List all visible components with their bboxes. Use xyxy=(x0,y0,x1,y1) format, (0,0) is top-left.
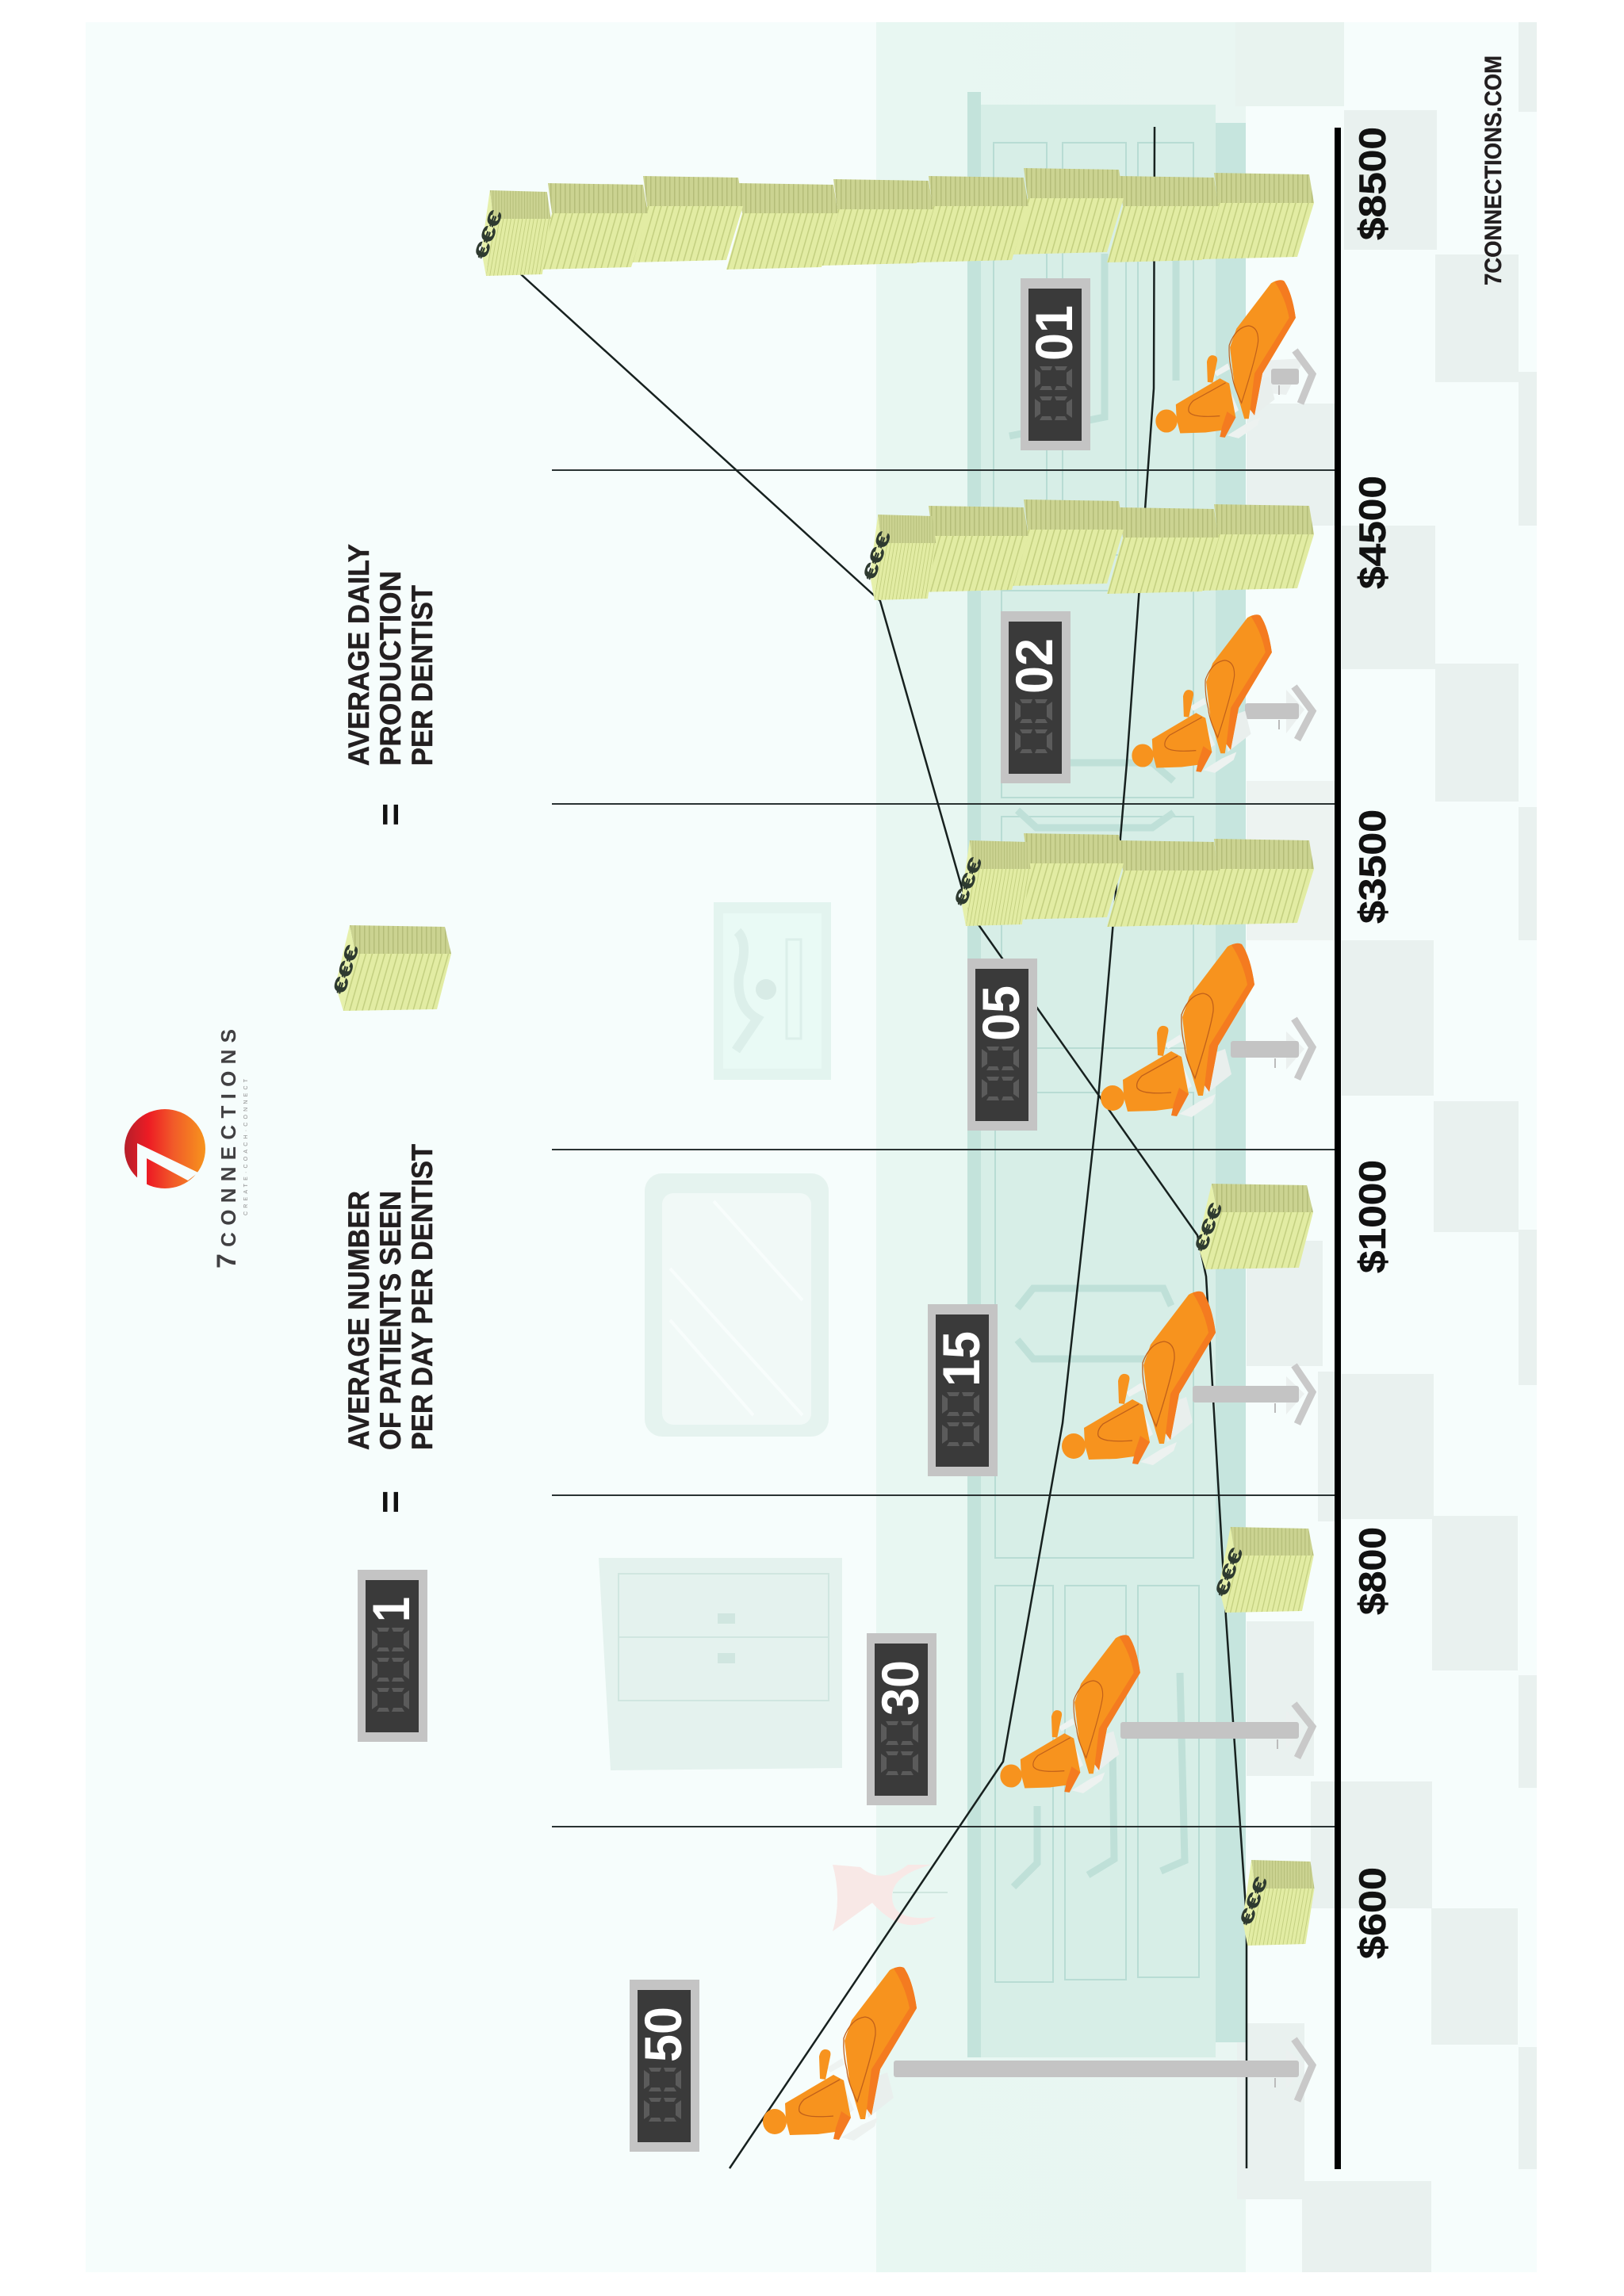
patient counter 15 xyxy=(928,1304,998,1476)
chair pole 800 xyxy=(1120,1704,1312,1758)
axis xyxy=(1335,128,1341,2169)
money stack 800: €€€ xyxy=(1211,1545,1247,1599)
axis labels xyxy=(1351,127,1393,1959)
logo wordmark: 7CONNECTIONS xyxy=(212,1029,242,1269)
chair pole 1000 xyxy=(1193,1365,1312,1424)
chair and patient 4500 xyxy=(1132,614,1272,773)
money stack 1000: €€€ xyxy=(1190,1200,1226,1254)
wall band xyxy=(876,22,1246,2272)
patient counter 15: 15 xyxy=(932,1331,990,1387)
patient counter 50 xyxy=(630,1980,699,2152)
chair and patient 3500 xyxy=(1101,943,1254,1117)
patient counter 50: 50 xyxy=(634,2007,692,2062)
money stack 600 xyxy=(1235,1860,1315,1946)
patient counter 01 xyxy=(1021,278,1090,450)
chair pole 4500 xyxy=(1245,687,1312,740)
money stack 8500: €€€ xyxy=(470,208,506,262)
division lines xyxy=(552,470,1338,1827)
wall cabinet xyxy=(599,1558,842,1770)
money stack 4500: €€€ xyxy=(859,529,894,583)
money stack 800 xyxy=(1211,1527,1314,1613)
tooth sign xyxy=(833,1865,948,1931)
axis labels: $600 xyxy=(1351,1867,1393,1959)
legend text: production: PER DENTIST xyxy=(406,585,439,766)
patients line xyxy=(730,127,1155,2168)
legend counter icon: 1 xyxy=(362,1597,420,1622)
chair and patient 800 xyxy=(1000,1635,1140,1793)
legend text: patients: AVERAGE NUMBER xyxy=(343,1191,375,1450)
legend text: production xyxy=(343,544,439,766)
chair and patient 1000 xyxy=(1062,1292,1216,1465)
chair pole 600 xyxy=(894,2039,1312,2101)
money stack 8500 xyxy=(470,168,1314,276)
money stack 600: €€€ xyxy=(1235,1874,1271,1928)
logo mark xyxy=(124,1109,205,1188)
axis labels: $3500 xyxy=(1351,809,1393,924)
money stack 3500: €€€ xyxy=(950,855,986,909)
equals sign: production: = xyxy=(368,803,412,826)
axis labels: $1000 xyxy=(1351,1160,1393,1273)
legend text: production: PRODUCTION xyxy=(374,571,407,766)
wall picture xyxy=(714,902,831,1080)
production line xyxy=(521,274,1247,2168)
legend text: patients: OF PATIENTS SEEN xyxy=(374,1191,407,1450)
axis labels: $4500 xyxy=(1351,476,1393,589)
chair and patient 8500 xyxy=(1155,280,1296,438)
chair and patient 600 xyxy=(763,1967,917,2141)
door xyxy=(967,92,1246,2057)
equals sign: patients: = xyxy=(368,1490,412,1513)
axis labels: $800 xyxy=(1351,1527,1393,1615)
logo wordmark: CREATE·COACH·CONNECT xyxy=(243,1078,249,1215)
money stack 1000 xyxy=(1190,1184,1313,1269)
legend counter icon xyxy=(358,1570,427,1742)
chair pole 8500 xyxy=(1261,350,1312,404)
legend money icon xyxy=(329,925,451,1011)
legend text: production: AVERAGE DAILY xyxy=(343,544,375,766)
legend text: patients: PER DAY PER DENTIST xyxy=(406,1144,439,1450)
legend text: patients xyxy=(343,1144,439,1450)
legend money icon: €€€ xyxy=(329,943,362,996)
patient counter 02: 02 xyxy=(1005,638,1063,694)
axis labels: $8500 xyxy=(1351,127,1393,240)
website: 7CONNECTIONS.COM xyxy=(1480,55,1507,285)
patient counter 05 xyxy=(967,959,1037,1131)
wall mirror xyxy=(645,1173,829,1437)
patient counter 01: 01 xyxy=(1025,305,1083,361)
patient counter 05: 05 xyxy=(971,985,1030,1041)
patient counter 30: 30 xyxy=(871,1660,929,1716)
money stack 3500 xyxy=(950,833,1314,927)
checkered floor xyxy=(1235,22,1537,2272)
chair pole 3500 xyxy=(1231,1019,1312,1079)
patient counter 02 xyxy=(1001,611,1071,783)
money stack 4500 xyxy=(859,499,1314,600)
patient counter 30 xyxy=(867,1633,936,1805)
